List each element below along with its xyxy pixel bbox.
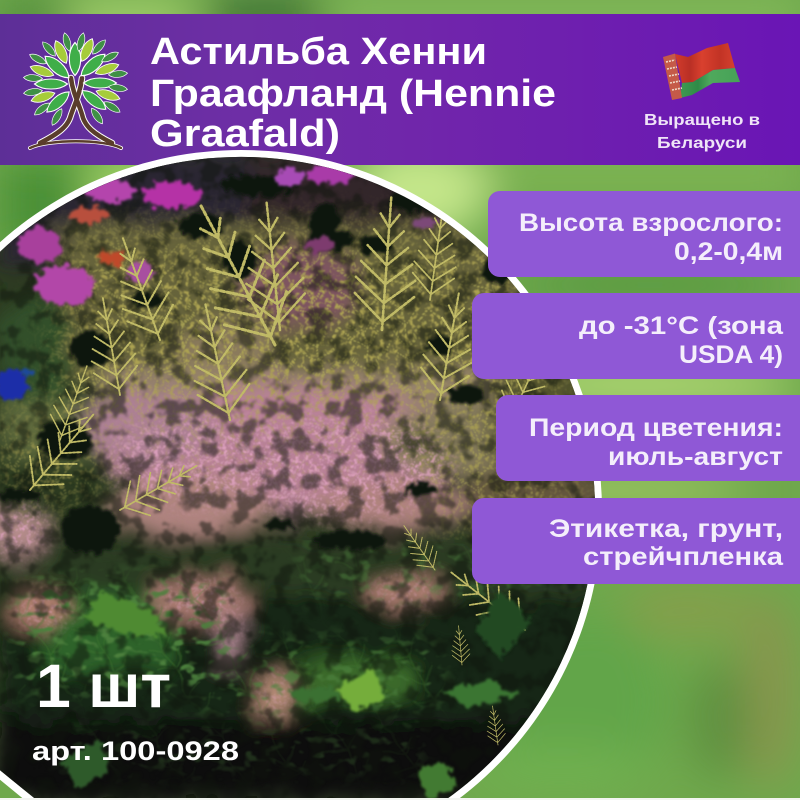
flag caption — [644, 112, 760, 152]
tree trunk and roots — [30, 78, 121, 148]
panel: frost hardiness — [472, 293, 800, 379]
logo: tree — [23, 32, 128, 148]
title: Граафланд (Hennie — [150, 73, 556, 115]
round plant photo with white ring — [0, 150, 610, 800]
top purple banner — [0, 14, 800, 165]
photo: dark blotches — [0, 150, 610, 800]
panel: flowering period: Период цветения: — [529, 414, 783, 442]
bottom edge line — [0, 798, 800, 800]
photo: magenta coneflowers — [0, 166, 437, 401]
panel: adult height — [488, 191, 800, 277]
title: Graafald) — [150, 113, 340, 155]
panel: frost hardiness: USDA 4) — [679, 341, 783, 369]
title — [150, 31, 556, 155]
panel: package contents: стрейчпленка — [583, 543, 784, 571]
article number: арт. 100-0928 — [32, 736, 239, 766]
leaves: inner dark green — [34, 42, 116, 116]
panel: package contents: Этикетка, грунт, — [549, 515, 783, 543]
icon: Belarus flag — [663, 43, 740, 100]
photo: dark gaps — [0, 175, 518, 554]
photo: golden flower fronds — [13, 187, 566, 746]
panel: flowering period: июль-август — [608, 443, 783, 471]
panel: adult height: 0,2-0,4м — [674, 238, 783, 266]
flag caption: Беларуси — [657, 135, 747, 152]
photo: golden twig texture — [0, 206, 584, 540]
photo: foliage texture — [6, 540, 542, 779]
leaves: lime — [29, 37, 121, 105]
flag caption: Выращено в — [644, 112, 760, 129]
panel: package contents — [472, 498, 800, 584]
photo: green foliage leaves — [60, 590, 530, 799]
leaves: outer green — [23, 32, 128, 127]
photo: pink flower texture — [0, 404, 462, 717]
title: Астильба Хенни — [150, 31, 487, 73]
quantity label: 1 шт — [36, 652, 171, 720]
panel: adult height: Высота взрослого: — [519, 209, 783, 237]
panel: frost hardiness: до -31°С (зона — [579, 312, 784, 340]
photo: colour masses — [0, 150, 600, 800]
panel: flowering period — [496, 395, 800, 481]
